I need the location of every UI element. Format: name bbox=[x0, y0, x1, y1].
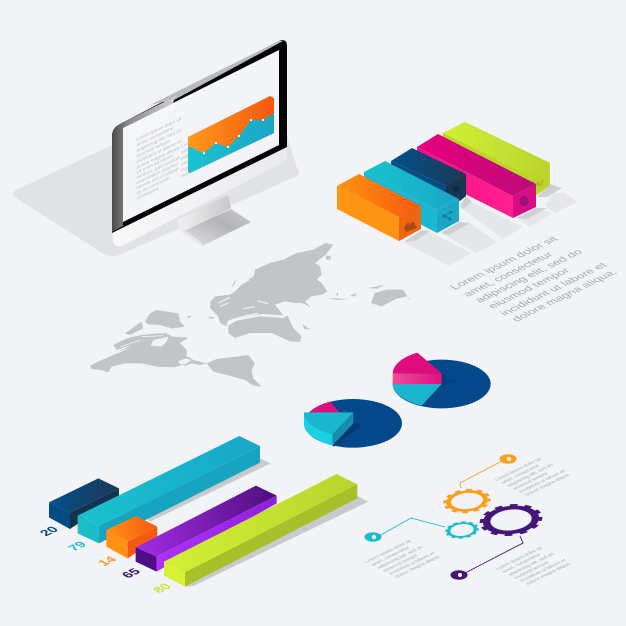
pink side bbox=[393, 373, 442, 384]
monitor top highlight bbox=[150, 41, 283, 105]
rotated paragraph: adipiscing elit, sed do bbox=[473, 248, 586, 304]
bar value labels: 79 bbox=[64, 539, 90, 553]
rotated paragraph: eiusmod tempor bbox=[486, 267, 573, 310]
gear text top: eiusmod tempor bbox=[512, 471, 550, 491]
screen chart bbox=[188, 96, 274, 173]
bar value labels: 14 bbox=[94, 554, 121, 568]
screen text: dolore magna aliqua. bbox=[136, 145, 180, 171]
gear text left: amet, consectetur bbox=[370, 546, 412, 567]
screen text: ex ea commodo bbox=[136, 175, 170, 197]
gear text left: Lorem ipsum dolor sit bbox=[364, 539, 414, 564]
teal slice bbox=[393, 384, 442, 406]
gear text right: incididunt ut labore et bbox=[519, 558, 569, 583]
navy bar bbox=[49, 478, 119, 529]
lime block bbox=[443, 122, 550, 195]
screen text: Lorem bbox=[181, 138, 194, 150]
block shadows bbox=[403, 184, 577, 266]
pink block bbox=[417, 134, 536, 218]
purple bar bbox=[136, 486, 277, 572]
icon: lock bbox=[453, 186, 459, 192]
madagascar bbox=[303, 324, 310, 330]
pie shade bbox=[333, 422, 362, 447]
gear text left: adipiscing elit, sed do bbox=[376, 545, 425, 570]
orange callout line and pin bbox=[460, 454, 516, 488]
screen text bbox=[136, 116, 194, 202]
iceland bbox=[187, 315, 192, 318]
bar shadows bbox=[147, 458, 368, 587]
orange gear bbox=[444, 488, 490, 514]
gear text top bbox=[494, 457, 572, 497]
australia bbox=[371, 290, 407, 306]
gear text left: eiusmod tempor bbox=[382, 553, 420, 573]
screen text: Lorem ipsum dolor sit bbox=[136, 116, 182, 143]
screen text: eiusm bbox=[181, 156, 193, 168]
monitor chin bbox=[112, 145, 287, 246]
screen text: amet, bbox=[181, 145, 193, 156]
navy block bbox=[391, 148, 466, 205]
pink top bbox=[393, 353, 442, 373]
pie base bbox=[393, 360, 491, 408]
bar blocks top right bbox=[337, 122, 577, 266]
gear text right: eiusmod tempor bbox=[513, 560, 551, 580]
orange block bbox=[337, 174, 421, 241]
pie shade bbox=[442, 373, 453, 385]
gear text right: Lorem ipsum dolor sit bbox=[495, 546, 545, 571]
screen text: adipis bbox=[181, 150, 194, 162]
world map bbox=[90, 243, 411, 387]
gear text top: adipiscing elit, sed do bbox=[506, 463, 555, 488]
screen text: laboris nisi ut aliquip bbox=[136, 166, 179, 191]
eurasia bbox=[210, 243, 333, 326]
old world bbox=[207, 243, 411, 342]
pie chart left bbox=[304, 399, 402, 448]
teal bar bbox=[78, 436, 260, 543]
purple gear bbox=[481, 503, 541, 537]
bar value labels: 65 bbox=[118, 566, 144, 580]
gear text left: incididunt ut labore et bbox=[388, 551, 438, 576]
monitor bbox=[13, 40, 299, 256]
gear text top: incididunt ut labore et bbox=[518, 469, 568, 494]
teal side bbox=[304, 412, 333, 445]
monitor stand bbox=[177, 195, 251, 246]
arctic channels bbox=[122, 332, 163, 347]
pie base bbox=[304, 399, 402, 448]
north america bbox=[90, 337, 188, 372]
icon: globe bbox=[520, 196, 528, 206]
screen text: eiusmod tempor bbox=[136, 138, 170, 160]
screen text: exercitation ullamco bbox=[136, 161, 178, 186]
monitor screen bbox=[123, 50, 279, 222]
bar value labels: 20 bbox=[36, 524, 62, 538]
gear text top: amet, consectetur bbox=[500, 464, 542, 485]
gear text right: amet, consectetur bbox=[501, 553, 543, 574]
rotated paragraph: incididunt ut labore et bbox=[498, 261, 611, 317]
teal block bbox=[364, 161, 459, 233]
lime bar bbox=[164, 474, 357, 587]
screen text: veniam, quis nostrud bbox=[136, 155, 180, 181]
screen text: consequat. bbox=[136, 185, 159, 202]
gulf of mexico bbox=[178, 358, 192, 364]
pink slice bbox=[309, 402, 340, 412]
teal callout line and pin bbox=[364, 518, 445, 542]
teal top bbox=[304, 412, 353, 434]
central america bbox=[178, 357, 207, 366]
bar value labels bbox=[36, 524, 175, 595]
screen text: Ut enim ad minim bbox=[136, 153, 173, 176]
arctic islands bbox=[125, 322, 143, 335]
gear text top: dolore magna aliqua. bbox=[524, 473, 572, 497]
rotated paragraph: amet, consectetur bbox=[461, 251, 556, 298]
teal gear bbox=[446, 521, 478, 539]
gear text right bbox=[495, 546, 573, 586]
icon: share bbox=[444, 212, 451, 219]
rotated paragraph bbox=[448, 235, 620, 323]
rotated paragraph: dolore magna aliqua. bbox=[510, 268, 620, 323]
americas bbox=[90, 310, 262, 387]
icon: people bbox=[404, 222, 417, 232]
hudson bay bbox=[151, 337, 168, 347]
greenland bbox=[145, 310, 185, 328]
screen text: adipiscing elit, sed do bbox=[136, 127, 182, 154]
3d bar chart bbox=[49, 436, 368, 587]
purple callout line and pin bbox=[450, 536, 523, 580]
gears infographic bbox=[364, 454, 573, 586]
rotated paragraph: Lorem ipsum dolor sit bbox=[448, 235, 561, 291]
icon: basket bbox=[533, 180, 543, 185]
orange bar bbox=[106, 516, 157, 558]
africa bbox=[228, 315, 302, 342]
monitor bezel highlight bbox=[112, 96, 176, 232]
gear text right: adipiscing elit, sed do bbox=[507, 552, 556, 577]
screen text: dolor bbox=[181, 169, 192, 180]
islands bbox=[207, 255, 411, 319]
gear text left: dolore magna aliqua. bbox=[394, 555, 442, 579]
inland seas bbox=[218, 297, 283, 321]
south america bbox=[207, 355, 262, 387]
monitor shadow bbox=[13, 135, 299, 256]
gear text left bbox=[364, 539, 442, 579]
screen text: incididunt ut labore et bbox=[136, 138, 182, 165]
gear text top: Lorem ipsum dolor sit bbox=[494, 457, 544, 482]
gear text right: dolore magna aliqua. bbox=[525, 562, 573, 586]
monitor frame bbox=[112, 40, 287, 233]
screen text: incidi bbox=[181, 163, 192, 174]
screen text: amet, consectetur bbox=[136, 125, 174, 148]
pie chart right bbox=[393, 353, 491, 408]
bar value labels: 80 bbox=[149, 581, 175, 595]
